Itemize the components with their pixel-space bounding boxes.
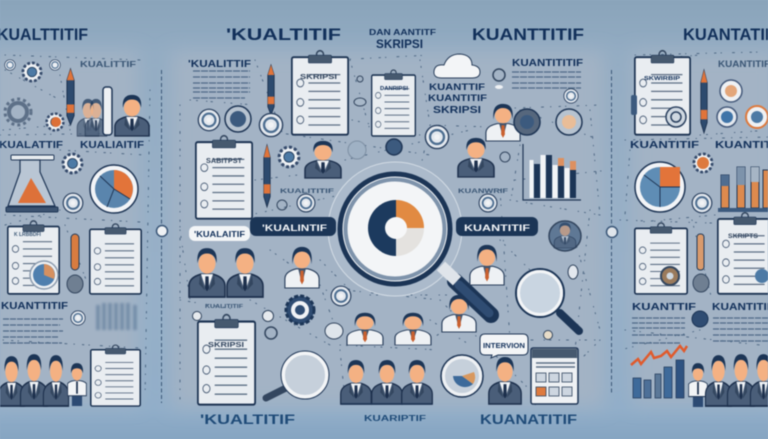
- badges: [425, 69, 510, 162]
- icon: orange marker: [67, 234, 83, 293]
- labels row: KUANTITIF: [712, 301, 768, 313]
- bottom small label: KUARIPTIF: [364, 414, 426, 423]
- small label: KUALITITIF: [205, 304, 243, 310]
- title text: [369, 28, 436, 51]
- magnifying glass: [328, 162, 491, 315]
- labels row: [630, 139, 768, 151]
- icon: gear and badge: [63, 155, 83, 213]
- clipboard: skripsi lower: SKRIPSI: [208, 340, 244, 349]
- small badges: [277, 76, 402, 212]
- clipboard: small: DANRIPSI: [380, 86, 409, 92]
- text stack: SKRIPSI: [433, 104, 481, 116]
- labels row: KUALIAITIF: [80, 140, 144, 151]
- icons: two discs: [198, 106, 251, 132]
- subheading: KUANTTITIF: [1, 300, 69, 312]
- clipboard: skripsi lower: [198, 315, 255, 405]
- text stack: KUANTTIF: [429, 82, 485, 93]
- label: dark pill left: [250, 217, 336, 236]
- pencil: [264, 145, 270, 207]
- magnifier with pie: [441, 355, 483, 397]
- small badges: [262, 286, 351, 339]
- label: white pill: [189, 226, 250, 241]
- labels row: [632, 301, 768, 313]
- text stack: [428, 82, 487, 116]
- person: [458, 138, 494, 177]
- icon: pencil: [67, 69, 74, 125]
- labels row: [0, 140, 144, 151]
- icon: disc: [692, 311, 708, 327]
- people trio: [341, 360, 432, 404]
- calculator: [531, 348, 578, 404]
- people with capsule: [77, 87, 149, 136]
- clipboard: [91, 345, 140, 406]
- clipboard with magnifier: K LRBBDFI: [14, 232, 42, 238]
- labels row: KUALATTIF: [0, 140, 63, 151]
- text block: [3, 319, 63, 343]
- clipboard: [90, 224, 141, 294]
- icon: cloud: [434, 54, 480, 78]
- heading: bottom kualitatif: 'KUALTITIF: [200, 411, 296, 427]
- clipboard: small: [372, 70, 415, 136]
- text block: [193, 71, 250, 98]
- clipboard: skripts: SKRIPTS: [728, 234, 758, 240]
- text block: [512, 72, 581, 88]
- text blocks: [632, 318, 768, 343]
- clipboard: skripsi: [292, 51, 348, 135]
- chart: growth bars: [631, 346, 687, 398]
- person: coat: [486, 104, 520, 141]
- label: dark pill right: KUANTITIF: [464, 223, 530, 234]
- callout: interview: [480, 334, 528, 358]
- icon: dark gear: [286, 296, 314, 324]
- icon: oval badge: [544, 221, 581, 340]
- heading: kuantitatif: KUANTTITIF: [472, 25, 584, 44]
- small label: KUANWRIF: [458, 188, 508, 195]
- clipboard with magnifier: [8, 221, 59, 294]
- chart: column bars: [718, 167, 768, 212]
- subheading right: KUANTITITIF: [512, 58, 583, 69]
- title text: DAN AANTITF: [369, 28, 436, 37]
- label: dark pill right: [456, 217, 538, 236]
- icons: discs: [514, 89, 582, 135]
- people group: [0, 354, 86, 406]
- gear: [280, 148, 298, 166]
- text stack: KUANTITIF: [428, 93, 487, 104]
- person behind handle: [442, 295, 476, 332]
- clipboard: skripsi: SKRIPSI: [300, 72, 337, 81]
- small label: KUALITITIF: [280, 188, 334, 195]
- divider: left: [156, 70, 168, 403]
- labels row: KUANTITIF: [630, 139, 700, 151]
- chart: pie: [635, 162, 685, 212]
- icon: gear and badge: [692, 154, 712, 213]
- divider: right: [606, 70, 618, 395]
- people coats pair: [347, 313, 431, 345]
- icon: flask: [6, 155, 58, 212]
- label: dark pill left: 'KUALINTIF: [262, 223, 327, 234]
- chart: donut: [368, 200, 424, 256]
- panel: central column: [188, 25, 584, 427]
- label: white pill: 'KUALAITIF: [194, 229, 245, 239]
- pencil: [701, 70, 707, 133]
- icon: marker: [693, 234, 709, 292]
- clipboard: sabitpst: [196, 136, 252, 219]
- labels row: KUANTITI: [715, 139, 768, 151]
- labels row: KUANTTIF: [632, 301, 697, 313]
- heading: bottom kuantitatif: KUANATITIF: [480, 411, 578, 427]
- heading: kualitatif: 'KUALTITIF: [226, 25, 341, 44]
- small label: [192, 304, 243, 320]
- clipboard: SKWIRBIP: [644, 76, 680, 82]
- icon: gears cluster: [5, 60, 63, 130]
- person: coat right: [470, 245, 504, 285]
- title text: SKRIPSI: [376, 39, 423, 51]
- callout: interview: INTERVION: [483, 343, 525, 350]
- panel: right column: [630, 25, 768, 407]
- badge: [479, 194, 497, 212]
- small heading: KUALITTIF: [80, 59, 136, 69]
- person: interview: [489, 357, 521, 404]
- clipboard: sabitpst: SABITPST: [206, 158, 243, 165]
- clipboard: [631, 51, 690, 135]
- blurred bars: [98, 303, 135, 330]
- magnifier right: [516, 269, 579, 331]
- people pair: [189, 248, 263, 297]
- people group: [689, 354, 768, 407]
- person: [305, 141, 341, 178]
- chart: pie: [90, 165, 138, 213]
- subheading: 'KUALITTIF: [188, 59, 251, 70]
- magnifier small: [266, 351, 329, 399]
- clipboard with donut: [635, 223, 687, 294]
- pencil with disc: [259, 65, 283, 137]
- chart: bars: [523, 144, 581, 200]
- panel: left column: [0, 25, 149, 406]
- person: coat: [285, 247, 319, 288]
- gears: [717, 80, 768, 128]
- icon: disc: [71, 311, 85, 325]
- clipboard: skripts: [718, 213, 768, 294]
- small heading: KUANTITIF: [718, 59, 768, 69]
